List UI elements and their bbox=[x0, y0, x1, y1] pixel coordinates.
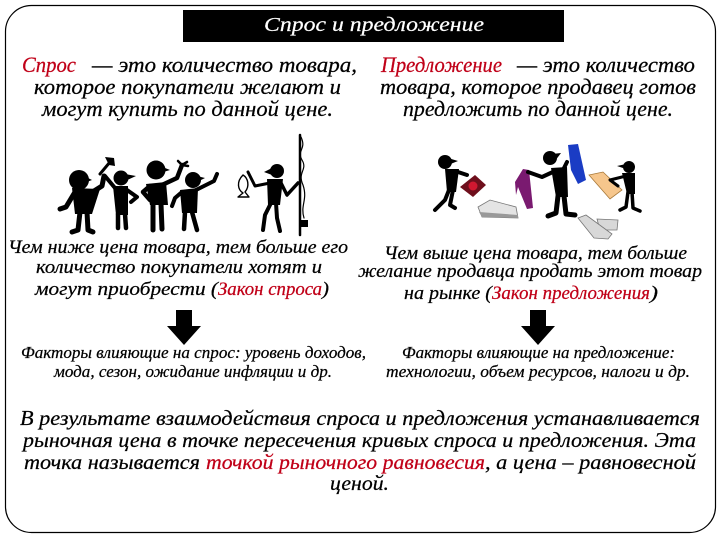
text: demand definition: могут купить по данной цене. bbox=[41, 96, 333, 121]
text: demand definition: которое покупатели желают и bbox=[34, 74, 341, 99]
text: demand factors: мода, сезон, ожидание инфляции и др. bbox=[53, 362, 332, 381]
title banner bbox=[183, 10, 564, 42]
text: conclusion: точкой рыночного равновесия bbox=[206, 450, 485, 474]
text: law of demand: могут приобрести ( bbox=[34, 279, 220, 300]
text: law of supply: на рынке ( bbox=[404, 283, 494, 304]
arrow: supply down bbox=[521, 310, 555, 345]
icon: buyer three bbox=[143, 160, 188, 230]
icon: seller with red box bbox=[435, 155, 486, 210]
text: law of demand: количество покупатели хотят и bbox=[36, 257, 322, 278]
text: supply definition: — это количество bbox=[516, 52, 695, 77]
text: supply factors: Факторы влияющие на предложение: bbox=[402, 343, 675, 362]
text: law of supply bbox=[358, 243, 702, 304]
text: conclusion: В результате взаимодействия спроса и предложения устанавливается bbox=[20, 406, 700, 430]
illustration: buyers bbox=[60, 135, 308, 235]
icon: fisher with fish and rod bbox=[238, 135, 308, 235]
text: law of demand: Закон спроса bbox=[218, 279, 322, 300]
text: supply factors bbox=[386, 343, 690, 381]
icon: gray boxes bbox=[578, 215, 618, 239]
text: law of demand: Чем ниже цена товара, тем больше его bbox=[8, 237, 348, 258]
text: law of supply: ) bbox=[649, 283, 658, 304]
text: law of supply: Чем выше цена товара, тем больше bbox=[384, 243, 687, 264]
text: law of demand: ) bbox=[321, 279, 329, 300]
illustration: sellers bbox=[435, 144, 640, 239]
text: conclusion: точка называется bbox=[24, 450, 200, 474]
text: supply factors: технологии, объем ресурсов, налоги и др. bbox=[386, 362, 690, 381]
icon: purple tie bbox=[515, 169, 533, 209]
text: demand definition bbox=[22, 52, 357, 121]
text: supply definition: Предложение bbox=[380, 52, 502, 77]
icon: orange box bbox=[589, 172, 622, 199]
text: demand factors: Факторы влияющие на спрос: уровень доходов, bbox=[21, 343, 366, 362]
text: demand definition: Спрос bbox=[22, 52, 76, 77]
text: demand definition: — это количество товара, bbox=[91, 52, 357, 77]
text: law of supply: Закон предложения bbox=[492, 283, 650, 304]
icon: buyer four bbox=[172, 172, 217, 230]
text: conclusion: , а цена – равновесной bbox=[485, 450, 696, 474]
text: conclusion: рыночная цена в точке пересечения кривых спроса и предложения. Эта bbox=[21, 428, 696, 452]
text: demand factors bbox=[21, 343, 366, 381]
text: supply definition: предложить по данной цене. bbox=[403, 96, 673, 121]
icon: blue tie bbox=[568, 144, 586, 184]
title banner: Спрос и предложение bbox=[264, 14, 484, 36]
text: law of supply: желание продавца продать этот товар bbox=[358, 261, 702, 282]
icon: buyer with axe bbox=[60, 157, 115, 232]
icon: buyer two bbox=[105, 170, 137, 228]
arrow: demand down bbox=[167, 310, 201, 345]
text: supply definition: товара, которое продавец готов bbox=[380, 74, 696, 99]
text: law of demand bbox=[8, 237, 348, 300]
icon: seller holding ties bbox=[528, 151, 575, 216]
text: conclusion: ценой. bbox=[330, 471, 389, 495]
icon: seller with orange box bbox=[610, 161, 640, 211]
text: supply definition bbox=[380, 52, 696, 121]
text: conclusion bbox=[20, 406, 700, 495]
icon: gray box bbox=[478, 200, 518, 218]
